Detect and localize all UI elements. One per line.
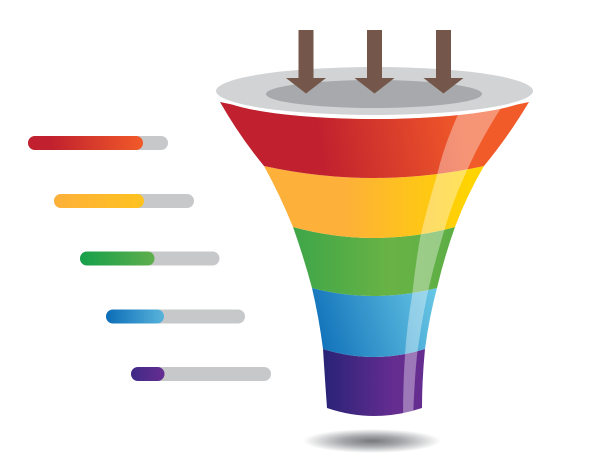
arrow 3 — [424, 30, 464, 94]
funnel shadow — [303, 429, 441, 453]
glass highlight — [403, 105, 503, 420]
funnel rim — [216, 67, 533, 119]
infographic canvas — [28, 30, 533, 452]
funnel body — [220, 102, 529, 420]
bar 3: green — [80, 252, 220, 266]
band: blue — [312, 288, 437, 357]
band: green — [293, 227, 455, 296]
bar 5: purple — [131, 367, 271, 381]
funnel opening — [266, 80, 482, 108]
bar 2: yellow — [54, 194, 194, 208]
rim white edge — [216, 67, 533, 119]
bar 1: red — [28, 136, 168, 150]
progress bars — [28, 136, 271, 381]
input arrows — [286, 30, 464, 94]
band: red — [220, 102, 529, 178]
band: purple — [323, 349, 425, 416]
bar 4: blue — [106, 310, 245, 324]
band: yellow — [264, 166, 484, 238]
arrow 2 — [354, 30, 394, 94]
rim top surface — [216, 67, 533, 115]
arrow 1 — [286, 30, 326, 94]
